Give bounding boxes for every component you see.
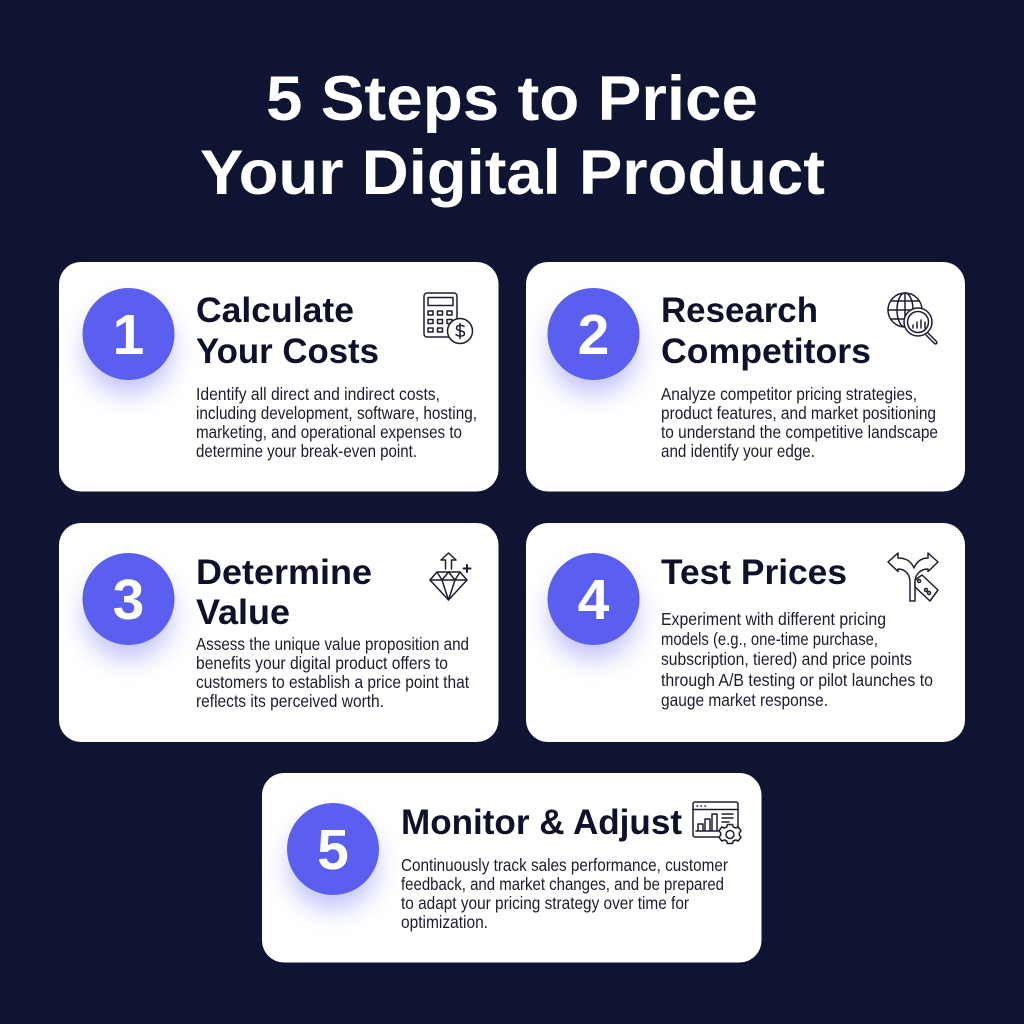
step 5 number badge: 5	[317, 818, 349, 882]
step 5 description: Continuously track sales performance, customer	[401, 855, 728, 875]
step 2 description: and identify your edge.	[661, 441, 815, 461]
icon: calculator with dollar coin	[424, 293, 472, 344]
step 4 number badge: 4	[578, 568, 610, 632]
step 4 description: models (e.g., one-time purchase,	[661, 629, 878, 649]
step 5 description: optimization.	[401, 912, 488, 932]
step 1 heading	[196, 291, 379, 371]
step 3 description: Assess the unique value proposition and	[196, 634, 469, 654]
step 1 heading: Your Costs	[196, 332, 379, 371]
step 5 description: feedback, and market changes, and be prepared	[401, 874, 724, 894]
step 5 description	[401, 855, 728, 932]
step 5 description: to adapt your pricing strategy over time for	[401, 893, 689, 913]
step 1 description: including development, software, hosting,	[196, 403, 477, 423]
step 2 heading: Research	[661, 291, 818, 330]
step 4 number badge	[548, 553, 640, 659]
icon: diamond with up arrow	[430, 553, 470, 600]
step 3 heading	[196, 553, 372, 632]
step 4 description: subscription, tiered) and price points	[661, 649, 912, 669]
step 2 heading: Competitors	[661, 332, 871, 371]
step 2 heading	[661, 291, 871, 371]
title	[200, 64, 825, 208]
step 1 number badge	[82, 288, 174, 394]
icon: diverging arrows with price tag	[888, 553, 938, 601]
step 4 description: gauge market response.	[661, 690, 828, 710]
step 3 description: reflects its perceived worth.	[196, 691, 384, 711]
step 2 description	[661, 384, 938, 461]
step 3 heading: Determine	[196, 553, 372, 592]
step 1 heading: Calculate	[196, 291, 354, 330]
panel: step 2 research competitors	[526, 262, 965, 492]
icon: dashboard window with gear	[693, 802, 741, 844]
step 4 description	[661, 609, 933, 710]
step 3 description	[196, 634, 469, 711]
step 2 description: product features, and market positioning	[661, 403, 936, 423]
panel: step 1 calculate your costs	[59, 262, 498, 492]
step 1 description: Identify all direct and indirect costs,	[196, 384, 440, 404]
step 1 number badge: 1	[113, 303, 144, 367]
panel: step 4 test prices	[526, 523, 965, 742]
step 2 description: to understand the competitive landscape	[661, 422, 938, 442]
step 3 number badge	[82, 553, 174, 659]
step 3 description: benefits your digital product offers to	[196, 653, 448, 673]
title: Your Digital Product	[200, 138, 825, 208]
icon: globe with magnifier and chart	[888, 293, 937, 344]
step 2 number badge	[548, 288, 640, 394]
step 2 number badge: 2	[578, 303, 609, 367]
panel: step 3 determine value	[59, 523, 498, 742]
step 4 description: Experiment with different pricing	[661, 609, 886, 629]
panel: step 5 monitor and adjust	[262, 773, 762, 962]
step 3 description: customers to establish a price point that	[196, 672, 469, 692]
step 1 description: marketing, and operational expenses to	[196, 422, 462, 442]
step 3 number badge: 3	[113, 568, 144, 632]
step 4 heading: Test Prices	[661, 553, 847, 592]
title: 5 Steps to Price	[266, 64, 758, 134]
step 5 heading: Monitor & Adjust	[401, 803, 682, 842]
step 1 description: determine your break-even point.	[196, 441, 417, 461]
step 3 heading: Value	[196, 593, 290, 632]
step 4 description: through A/B testing or pilot launches to	[661, 670, 933, 690]
step 2 description: Analyze competitor pricing strategies,	[661, 384, 917, 404]
step 1 description	[196, 384, 477, 461]
step 5 number badge	[287, 803, 379, 909]
